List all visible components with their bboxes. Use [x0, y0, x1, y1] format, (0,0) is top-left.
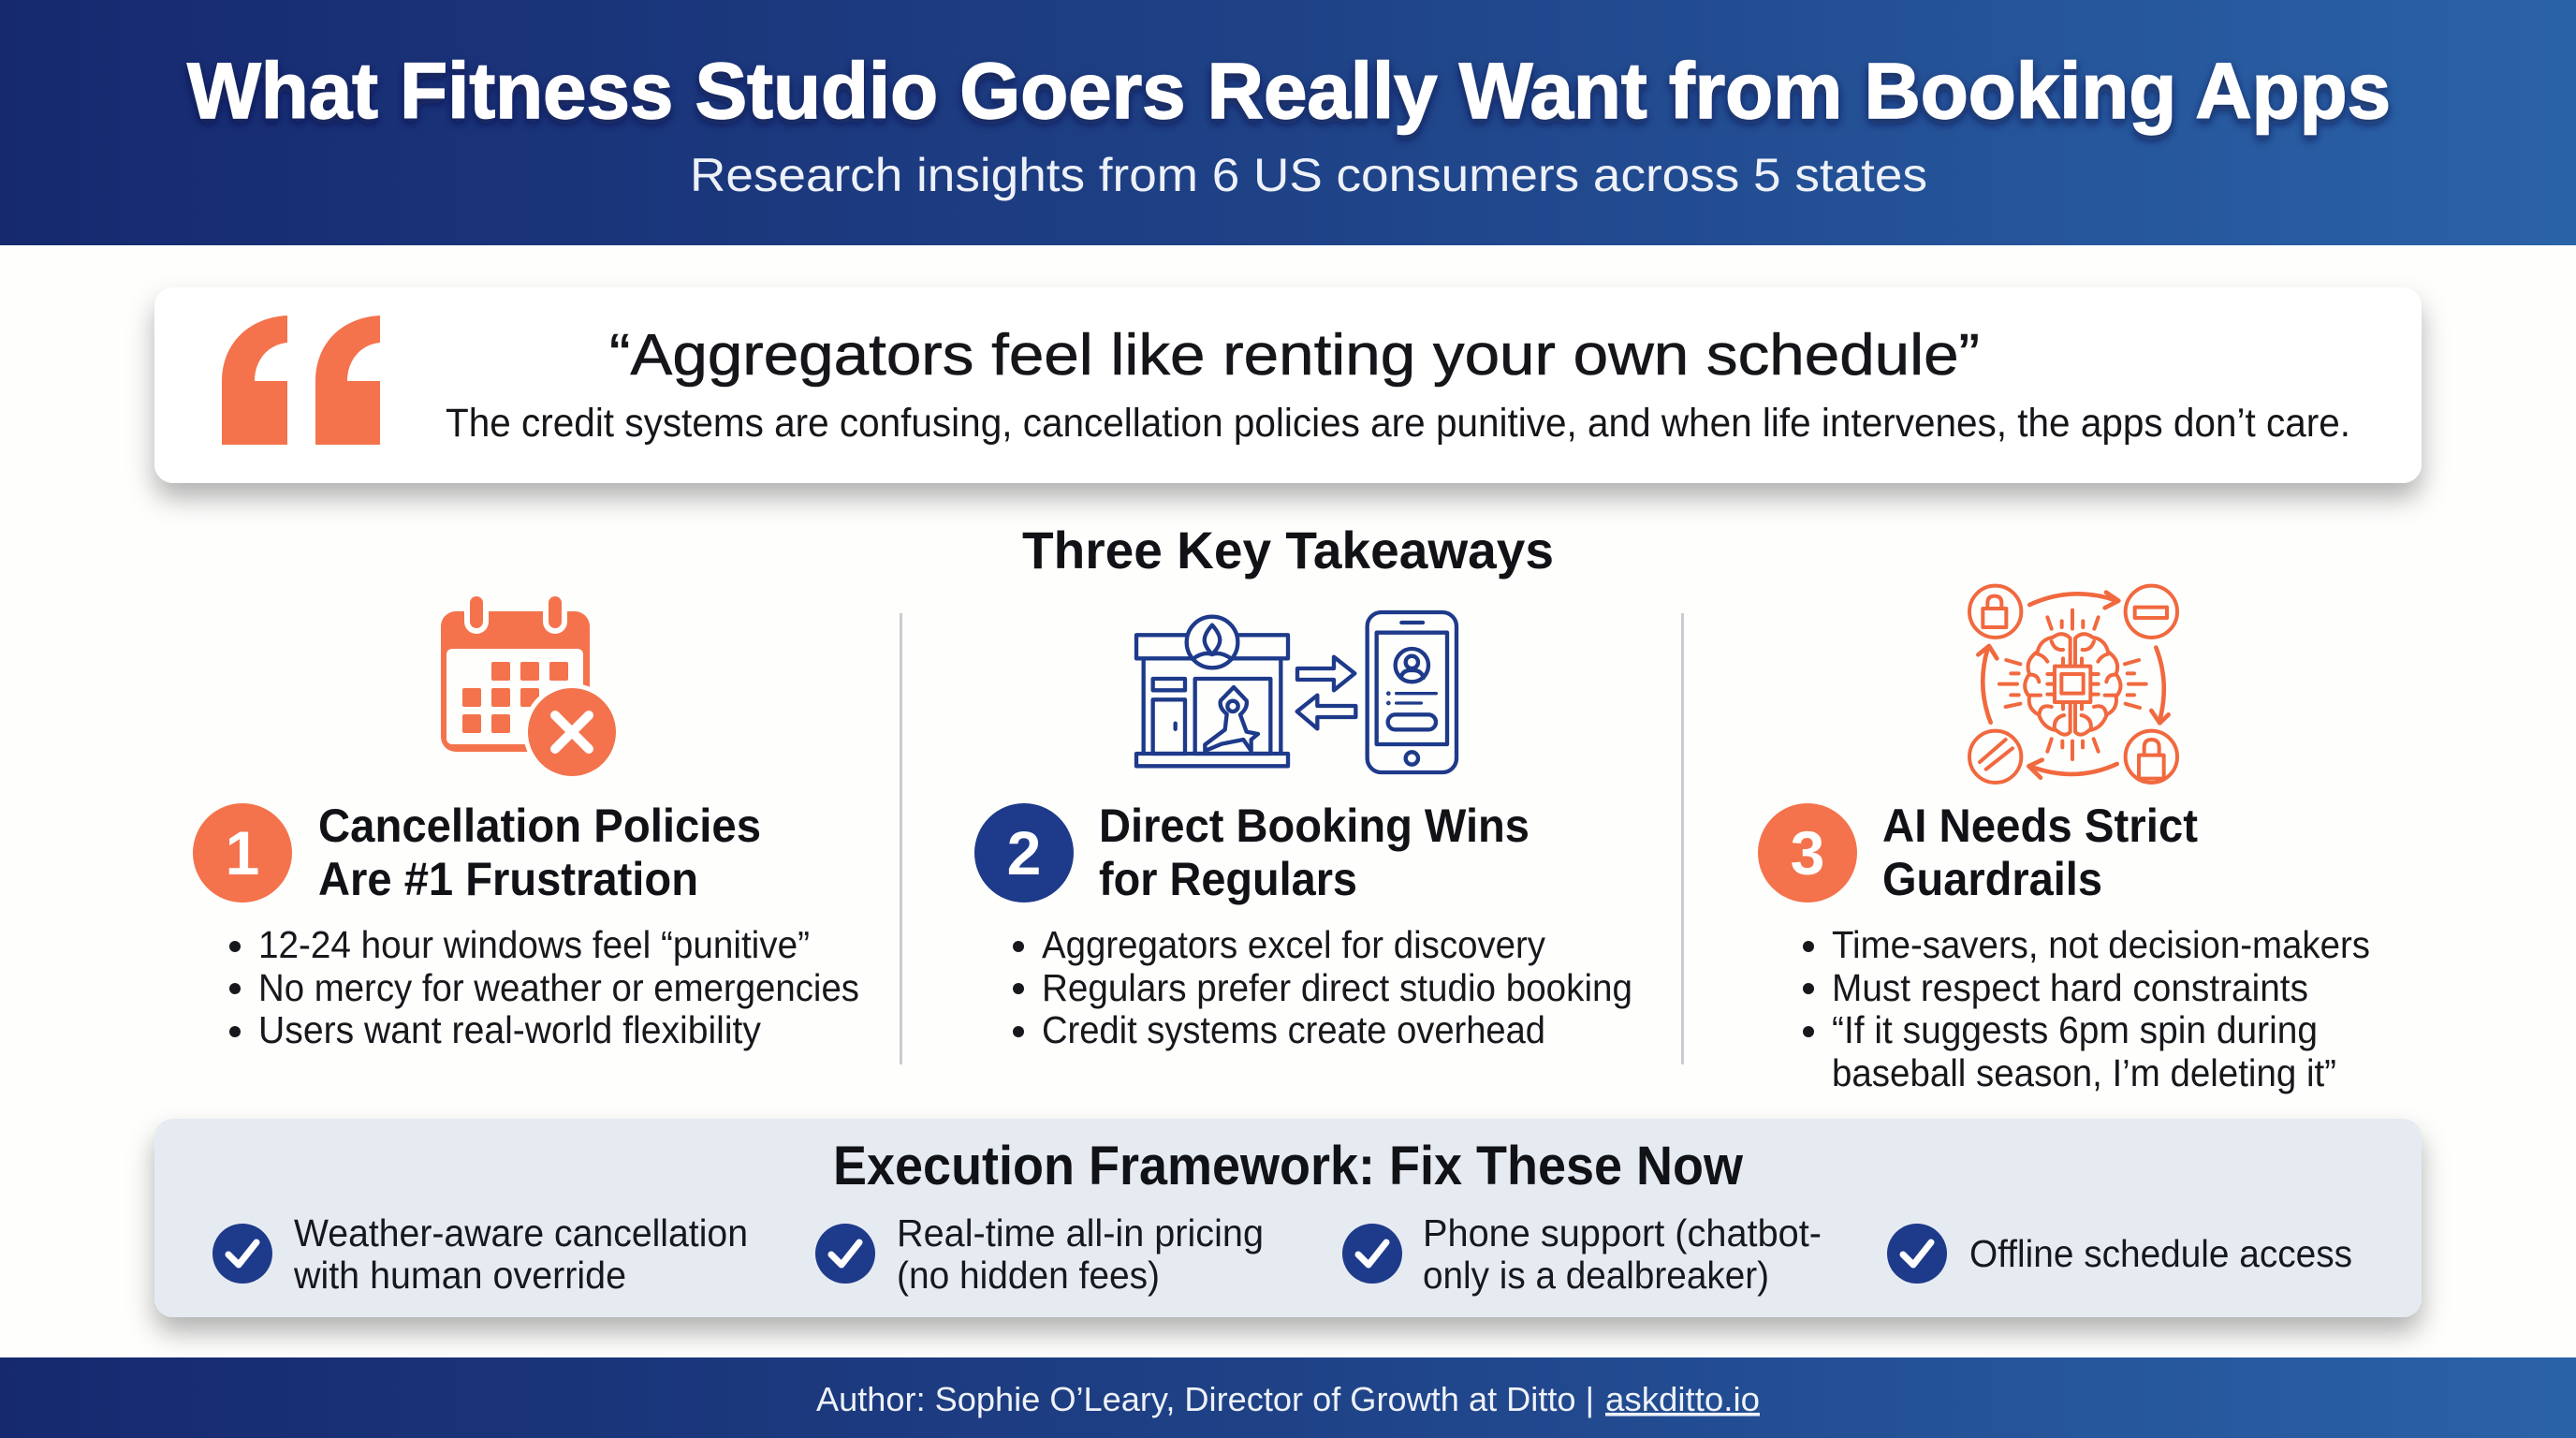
item 3: Phone support (chatbot- [1423, 1211, 1822, 1255]
heading 1: Are #1 Frustration [318, 853, 698, 905]
bullet list 2: Regulars prefer direct studio booking [1042, 966, 1632, 1009]
quote headline: “Aggregators feel like renting your own schedule” [609, 323, 1980, 388]
item 1: Weather-aware cancellation [294, 1211, 748, 1255]
heading 1: Cancellation Policies [318, 800, 761, 852]
footer bar [0, 1357, 2576, 1438]
number badge 3 [1758, 803, 1857, 902]
bullet list 2 [1013, 923, 1632, 1051]
bullet list 3 [1803, 923, 2370, 1094]
item 4: Offline schedule access [1969, 1232, 2352, 1275]
heading: three key takeaways: Three Key Takeaways [1022, 521, 1554, 580]
heading 3: AI Needs Strict [1882, 800, 2198, 852]
title: What Fitness Studio Goers Really Want from Booking Apps [187, 47, 2391, 135]
bullet list 3: baseball season, I’m deleting it” [1832, 1051, 2336, 1094]
heading 3: Guardrails [1882, 853, 2102, 905]
takeaway 1 [193, 591, 859, 1051]
bullet list 2: Credit systems create overhead [1042, 1008, 1545, 1051]
heading 2: Direct Booking Wins [1099, 800, 1530, 852]
heading 2: for Regulars [1099, 853, 1357, 905]
item 3 [1342, 1211, 1822, 1297]
heading 1 [318, 800, 761, 905]
bullet list 3: Must respect hard constraints [1832, 966, 2308, 1009]
header banner [0, 0, 2576, 245]
item 3: only is a dealbreaker) [1423, 1254, 1769, 1297]
number badge 2: 2 [1007, 818, 1041, 888]
bullet list 1: 12-24 hour windows feel “punitive” [258, 923, 810, 966]
takeaway 3 [1758, 586, 2370, 1094]
icon: AI brain chip with guardrail symbols [1969, 586, 2177, 783]
icon: studio and phone with two-way arrows [1136, 612, 1456, 772]
number badge 1 [193, 803, 292, 902]
execution heading: Execution Framework: Fix These Now [833, 1136, 1744, 1196]
item 1: with human override [293, 1254, 626, 1297]
number badge 2 [974, 803, 1074, 902]
item 1 [212, 1211, 748, 1297]
bullet list 1 [229, 923, 859, 1051]
panel: execution framework [154, 1119, 2422, 1317]
subtitle: Research insights from 6 US consumers across 5 states [690, 149, 1927, 201]
number badge 1: 1 [226, 818, 259, 888]
item 4 [1887, 1224, 2352, 1284]
bullet list 3: Time-savers, not decision-makers [1832, 923, 2370, 966]
heading 3 [1882, 800, 2198, 905]
takeaway 2 [974, 612, 1632, 1051]
bullet list 2: Aggregators excel for discovery [1042, 923, 1545, 966]
item 2: Real-time all-in pricing [897, 1211, 1264, 1255]
icon: calendar with cancel mark [441, 591, 621, 781]
item 2: (no hidden fees) [897, 1254, 1160, 1297]
author credit: Author: Sophie O’Leary, Director of Growth at Ditto | [816, 1380, 1594, 1418]
quote supporting text: The credit systems are confusing, cancellation policies are punitive, and when life intervenes, the apps don’t care. [446, 401, 2350, 446]
icon: quotation marks [222, 315, 380, 445]
bullet list 3: “If it suggests 6pm spin during [1832, 1008, 2318, 1051]
number badge 3: 3 [1791, 818, 1824, 888]
bullet list 1: No mercy for weather or emergencies [258, 966, 859, 1009]
website link: askditto.io [1605, 1380, 1760, 1418]
bullet list 1: Users want real-world flexibility [258, 1008, 761, 1051]
heading 2 [1099, 800, 1530, 905]
item 2 [815, 1211, 1264, 1297]
panel: quote card [154, 287, 2422, 483]
